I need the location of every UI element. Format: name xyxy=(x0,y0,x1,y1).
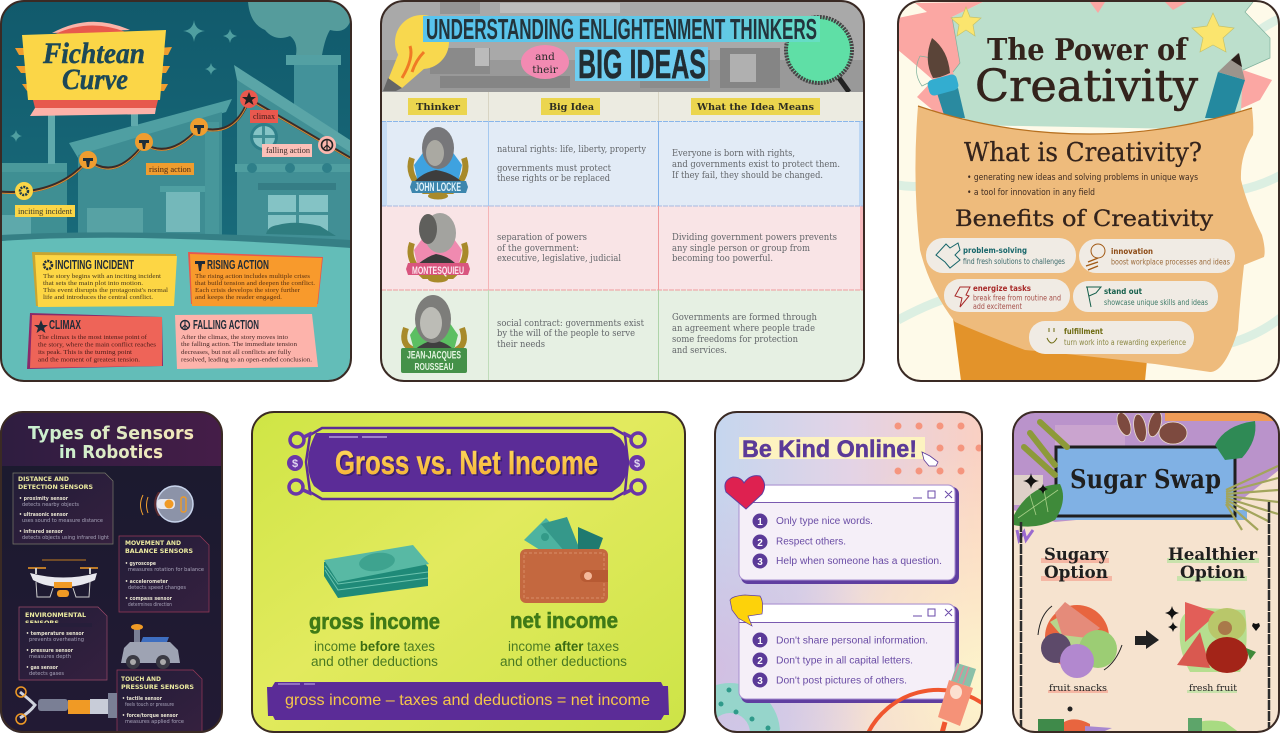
box: falling action: resolved, leading to an open-ended conclusion. xyxy=(181,356,312,364)
benefit: problem-solving xyxy=(926,238,1076,273)
box: touch sensors: • force/torque sensor xyxy=(122,713,179,719)
benefit: innovation: boost workplace processes and ideas xyxy=(1111,258,1230,266)
box: environmental sensors: • gas sensor xyxy=(26,665,59,671)
benefits heading: Benefits of Creativity xyxy=(955,207,1214,232)
window: do list: 3 xyxy=(757,557,763,568)
what is creativity: • a tool for innovation in any field xyxy=(967,188,1095,198)
box: climax: The climax is the most intense point of xyxy=(38,334,148,341)
box: movement sensors: BALANCE SENSORS xyxy=(125,548,193,555)
row text: of the government: xyxy=(497,243,579,254)
box: touch sensors: measures applied force xyxy=(125,719,184,725)
pink hair xyxy=(898,2,983,118)
healthier option heading xyxy=(1167,545,1259,583)
icon: network plug xyxy=(938,663,976,733)
box: falling action: decreases, but not all conflicts are fully xyxy=(181,349,292,356)
table xyxy=(381,92,864,381)
benefit: fulfillment: turn work into a rewarding experience xyxy=(1064,338,1186,347)
healthier option heading: Option xyxy=(1180,563,1245,583)
what is creativity: What is Creativity? xyxy=(964,138,1202,168)
sign: Curve xyxy=(62,63,128,96)
box: distance sensors: DETECTION SENSORS xyxy=(18,484,93,491)
side rails xyxy=(1020,522,1022,733)
title: in Robotics xyxy=(59,442,163,463)
box: environmental sensors: SENSORS xyxy=(25,620,59,627)
title xyxy=(975,33,1198,112)
row text xyxy=(497,144,840,356)
icon: robot vacuum xyxy=(140,486,193,522)
box: inciting incident: INCITING INCIDENT xyxy=(55,257,134,272)
portrait: John Locke: JOHN LOCKE xyxy=(415,182,461,194)
row text: any single person or group from xyxy=(672,243,810,254)
portrait: Rousseau xyxy=(401,295,467,373)
row text: becoming too powerful. xyxy=(672,253,773,264)
icon: heart xyxy=(725,476,765,509)
row text: Governments are formed through xyxy=(672,312,817,323)
window: don't list: Don't share personal information. xyxy=(776,636,928,646)
box: inciting incident: The story begins with an inciting incident xyxy=(43,273,161,280)
portrait: Montesquieu: MONTESQUIEU xyxy=(412,265,464,277)
benefit: problem-solving: find fresh solutions to challenges xyxy=(963,257,1065,266)
row text: and services. xyxy=(672,345,727,356)
box: rising action: RISING ACTION xyxy=(207,257,269,272)
mint hair xyxy=(952,2,1270,130)
title xyxy=(423,16,820,81)
box: environmental sensors xyxy=(19,607,107,680)
cable xyxy=(868,690,982,733)
box: environmental sensors: ENVIRONMENTAL xyxy=(25,612,86,619)
box: environmental sensors: prevents overheating xyxy=(29,637,84,643)
box: touch sensors: TOUCH AND xyxy=(121,676,161,683)
box: inciting incident xyxy=(32,252,177,307)
box: distance sensors: detects nearby objects xyxy=(22,502,80,508)
collage header xyxy=(1013,412,1279,522)
benefit: energize tasks: energize tasks xyxy=(973,284,1031,293)
row text: executive, legislative, judicial xyxy=(497,253,621,264)
row text: and governments exist to protect them. xyxy=(672,159,840,170)
food captions: fresh fruit xyxy=(1189,684,1237,694)
healthier option heading: Healthier xyxy=(1168,545,1258,565)
box: distance sensors xyxy=(13,473,113,544)
box: movement sensors: • compass sensor xyxy=(125,596,173,602)
box: movement sensors: MOVEMENT AND xyxy=(125,540,181,547)
formula bar: gross income – taxes and deductions = net income xyxy=(285,692,650,709)
column headers: Thinker xyxy=(416,102,461,113)
brown leaves xyxy=(1114,410,1187,444)
window: don't list: 1 xyxy=(757,636,763,647)
benefit: fulfillment xyxy=(1029,321,1194,354)
sign xyxy=(15,22,172,164)
window: do list: Only type nice words. xyxy=(776,516,873,527)
smoke xyxy=(248,2,350,55)
illustration: fresh fruit xyxy=(1165,602,1260,673)
title xyxy=(28,423,194,463)
box: environmental sensors: detects gases xyxy=(29,671,65,677)
panel: Fichtean Curve xyxy=(0,1,351,381)
row text: governments must protect xyxy=(497,163,611,174)
what is creativity: • generating new ideas and solving problems in unique ways xyxy=(967,173,1198,183)
row text: separation of powers xyxy=(497,232,587,243)
portrait: Rousseau: ROUSSEAU xyxy=(414,361,454,373)
sugary option heading: Option xyxy=(1044,563,1108,583)
box: falling action: the falling action. The immediate tension xyxy=(181,341,298,348)
icon: light bulb xyxy=(383,15,449,91)
box: movement sensors: determines direction xyxy=(128,602,172,608)
window: don't list: 2 xyxy=(757,656,763,667)
box: movement sensors: • accelerometer xyxy=(125,579,169,585)
curve xyxy=(0,99,350,194)
window: do list: 2 xyxy=(757,538,763,549)
column: net income xyxy=(500,608,627,669)
benefit: fulfillment: fulfillment xyxy=(1064,327,1103,336)
icon: robot arm xyxy=(16,687,117,724)
column: gross income: income before taxes xyxy=(314,639,435,654)
window: do list xyxy=(739,485,959,584)
title banner: $ xyxy=(292,458,298,470)
box: environmental sensors: • pressure sensor xyxy=(26,648,74,654)
column: gross income xyxy=(309,609,440,669)
curve labels: falling action xyxy=(266,146,310,155)
box: touch sensors: feels touch or pressure xyxy=(125,702,174,708)
panel: Types of Sensors in Robotics xyxy=(0,412,222,733)
window: do list: Help when someone has a question. xyxy=(776,556,942,567)
column: gross income: gross income xyxy=(309,609,440,634)
title: Creativity xyxy=(975,61,1198,112)
box: environmental sensors: measures depth xyxy=(29,654,71,660)
title: and xyxy=(535,51,555,63)
stars xyxy=(10,20,237,142)
box: climax: CLIMAX xyxy=(49,317,81,332)
box: rising action xyxy=(188,252,323,307)
icon: wallet xyxy=(520,517,608,603)
box: movement sensors: • gyroscope xyxy=(125,561,157,567)
title: Types of Sensors xyxy=(28,423,194,444)
decorative plants xyxy=(1014,421,1278,540)
row text: Dividing government powers prevents xyxy=(672,232,837,243)
star icons xyxy=(951,7,1234,52)
portrait: Rousseau: JEAN-JACQUES xyxy=(407,350,461,362)
what is creativity xyxy=(964,138,1202,198)
background swooshes xyxy=(898,15,1280,350)
box: rising action: and keeps the reader engaged. xyxy=(195,294,282,301)
sugary option heading: Sugary xyxy=(1044,545,1109,565)
panel: Be Kind Online xyxy=(680,412,982,733)
food captions: fruit snacks xyxy=(1049,684,1107,694)
benefit: innovation: innovation xyxy=(1111,247,1153,256)
header collage xyxy=(381,2,864,92)
icon: cash stack xyxy=(324,545,429,598)
formula bar xyxy=(267,682,669,720)
panel: The Power of Creativity xyxy=(898,1,1280,381)
panel: Enlightenment Thinkers xyxy=(381,1,864,381)
title banner xyxy=(287,428,645,499)
column: net income: income after taxes xyxy=(508,639,619,654)
window: don't list: Don't post pictures of others. xyxy=(776,676,907,686)
curve labels xyxy=(15,110,312,217)
neck xyxy=(953,318,1147,381)
benefit: stand out: showcase unique skills and ideas xyxy=(1104,298,1208,307)
box: climax: the story, where the main conflict reaches xyxy=(38,342,156,348)
curve nodes xyxy=(15,90,336,200)
box: distance sensors: • infrared sensor xyxy=(19,529,64,535)
window: don't list: 3 xyxy=(757,676,763,687)
box: touch sensors: • tactile sensor xyxy=(122,696,163,702)
box: distance sensors: • proximity sensor xyxy=(19,496,69,502)
column headers: Big Idea xyxy=(549,102,594,113)
illustration: fruit snacks xyxy=(1038,602,1122,678)
icon: donut xyxy=(680,683,780,733)
icon: rover xyxy=(121,624,180,669)
box: environmental sensors: • temperature sensor xyxy=(26,631,85,637)
column: net income: net income xyxy=(510,608,618,633)
sign title: Fichtean xyxy=(42,37,145,70)
icon: drone xyxy=(28,560,98,597)
title: UNDERSTANDING ENLIGHTENMENT THINKERS xyxy=(426,14,817,46)
title: The Power of xyxy=(987,33,1189,68)
icon: thumbs down xyxy=(730,595,763,626)
window: don't list: Don't type in all capital letters. xyxy=(776,656,913,666)
panel: Gross vs. Net Income xyxy=(252,412,685,733)
title: Be Kind Online! xyxy=(742,436,917,463)
row text: by the will of the people to serve xyxy=(497,328,635,339)
box: distance sensors: uses sound to measure distance xyxy=(22,518,103,524)
food captions xyxy=(1048,684,1237,694)
row text: social contract: governments exist xyxy=(497,318,644,329)
benefit: stand out xyxy=(1073,281,1218,312)
window: do list: Respect others. xyxy=(776,536,846,548)
row text: If they fail, they should be changed. xyxy=(672,170,823,181)
row text: Everyone is born with rights, xyxy=(672,148,795,159)
title: their xyxy=(532,64,559,76)
box: rising action: Each crisis develops the story further xyxy=(195,287,301,294)
column headers xyxy=(408,98,820,115)
column: net income: and other deductions xyxy=(500,654,627,669)
benefit: energize tasks: add excitement xyxy=(973,302,1022,311)
box: touch sensors xyxy=(117,670,202,732)
box: falling action xyxy=(175,314,318,369)
title banner: Gross vs. Net Income xyxy=(336,446,600,482)
box: climax xyxy=(27,313,163,369)
ground xyxy=(1,236,351,381)
curve labels: inciting incident xyxy=(18,207,73,216)
benefit: innovation xyxy=(1079,239,1235,273)
column: gross income: and other deductions xyxy=(311,654,438,669)
box: movement sensors: detects speed changes xyxy=(128,585,187,591)
window: don't list xyxy=(739,604,959,703)
benefit: problem-solving: problem-solving xyxy=(963,246,1027,255)
title banner: Gross vs. Net Income xyxy=(335,444,598,481)
box: rising action: The rising action includes multiple crises xyxy=(195,273,310,280)
box: touch sensors: PRESSURE SENSORS xyxy=(121,684,194,691)
column headers: What the Idea Means xyxy=(696,102,814,113)
row text: natural rights: life, liberty, property xyxy=(497,144,646,155)
benefit: stand out: stand out xyxy=(1104,287,1142,296)
box: movement sensors: measures rotation for balance xyxy=(128,567,204,573)
icon: magnifying glass xyxy=(786,17,852,92)
portrait: Montesquieu xyxy=(406,213,470,282)
panel: Sugar Swap xyxy=(1013,410,1279,733)
box: climax: and the moment of greatest tension. xyxy=(38,356,140,364)
box: falling action: FALLING ACTION xyxy=(193,317,259,332)
dots xyxy=(894,422,982,474)
face shape xyxy=(915,106,1265,372)
box: inciting incident: that sets the main plot into motion. xyxy=(43,280,143,287)
box: distance sensors: • ultrasonic sensor xyxy=(19,512,69,518)
middle house xyxy=(69,99,232,240)
box: inciting incident: This event disrupts the protagonist's normal xyxy=(43,287,168,294)
sugary option heading xyxy=(1041,545,1112,583)
portrait: John Locke xyxy=(410,127,468,200)
curve labels: rising action xyxy=(149,165,191,174)
box: climax: its peak. This is the turning point xyxy=(38,349,132,356)
box: inciting incident: life and introduces the central conflict. xyxy=(43,294,153,301)
title box xyxy=(1047,447,1247,520)
box: distance sensors: detects objects using infrared light xyxy=(22,535,109,541)
row text: an agreement where people trade xyxy=(672,323,815,334)
benefit: energize tasks xyxy=(944,279,1070,312)
box: rising action: that build tension and deepen the conflict. xyxy=(195,280,315,287)
benefit: energize tasks: break free from routine and xyxy=(973,294,1061,302)
box: distance sensors: DISTANCE AND xyxy=(18,476,69,483)
icon: pencil xyxy=(1205,53,1245,118)
row text: their needs xyxy=(497,339,545,350)
icon: paintbrush xyxy=(926,38,965,118)
window: do list: 1 xyxy=(757,517,763,528)
curve labels: climax xyxy=(253,112,275,121)
title banner: $ xyxy=(634,458,640,470)
box: falling action: After the climax, the story moves into xyxy=(181,334,289,341)
row text: some freedoms for protection xyxy=(672,334,798,345)
title: BIG IDEAS xyxy=(578,41,706,87)
box: movement sensors xyxy=(119,536,209,612)
right house xyxy=(234,55,350,240)
row text: these rights or be replaced xyxy=(497,173,610,184)
title box: Sugar Swap xyxy=(1070,465,1221,495)
icon: pointer hand xyxy=(922,452,938,466)
arrow xyxy=(1135,630,1159,649)
next row illustrations xyxy=(1038,706,1240,733)
left house xyxy=(1,163,67,238)
